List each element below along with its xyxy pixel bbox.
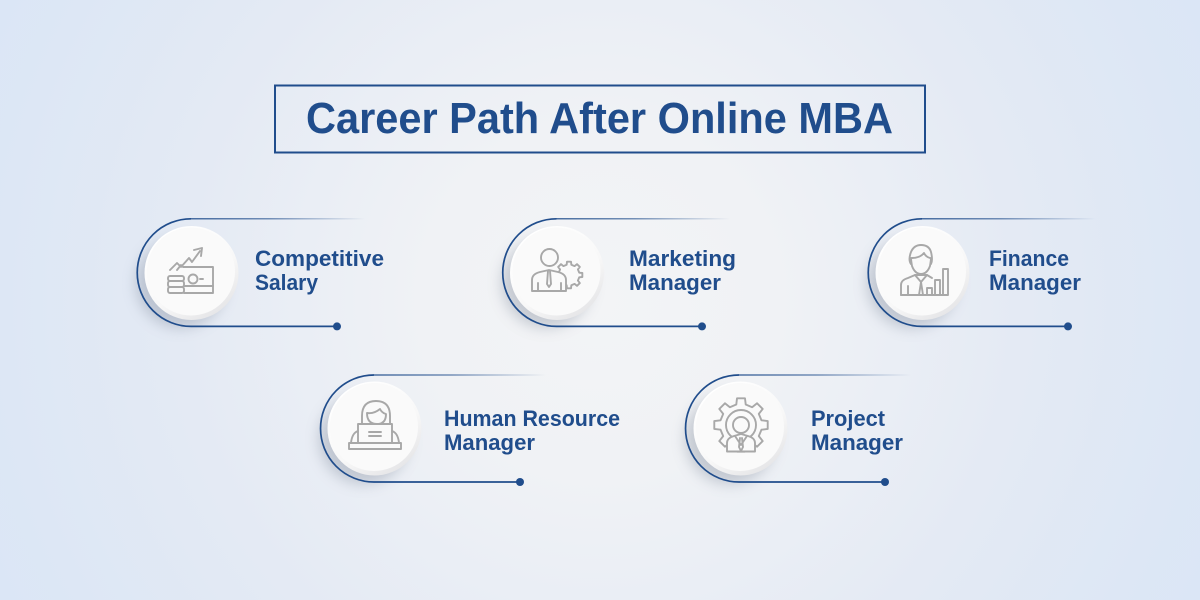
shadow xyxy=(685,394,775,484)
outline and connector xyxy=(503,218,730,330)
label xyxy=(811,406,903,455)
label: Manager xyxy=(989,270,1081,295)
disc xyxy=(694,382,788,476)
label: Human Resource xyxy=(444,406,620,431)
card: Project Manager xyxy=(685,374,911,486)
disc xyxy=(144,226,238,320)
label: Finance xyxy=(989,246,1069,271)
outline and connector xyxy=(686,374,911,486)
label: Marketing xyxy=(629,246,736,271)
icon: manager with gear xyxy=(532,249,582,291)
label xyxy=(444,406,620,455)
outline and connector xyxy=(137,218,365,330)
outline and connector xyxy=(321,374,546,486)
disc xyxy=(876,226,970,320)
disc xyxy=(328,382,422,476)
icon: manager with bar chart xyxy=(901,245,948,295)
icon: manager inside gear xyxy=(714,398,768,452)
label: Manager xyxy=(444,430,535,455)
shadow xyxy=(319,394,409,484)
label: Project xyxy=(811,406,886,431)
card: Competitive Salary xyxy=(136,218,384,330)
label: Competitive xyxy=(255,246,384,271)
shadow xyxy=(136,238,226,328)
shadow xyxy=(502,238,592,328)
label xyxy=(629,246,736,295)
label: Salary xyxy=(255,270,319,295)
label xyxy=(989,246,1081,295)
card: Human Resource Manager xyxy=(319,374,620,486)
label: Manager xyxy=(629,270,721,295)
disc xyxy=(510,226,604,320)
label: Manager xyxy=(811,430,903,455)
shadow xyxy=(867,238,957,328)
label xyxy=(255,246,384,295)
title: Career Path After Online MBA xyxy=(306,94,893,143)
card: Finance Manager xyxy=(867,218,1096,330)
outline and connector xyxy=(868,218,1096,330)
icon: woman at laptop xyxy=(349,401,401,449)
icon: money and rising arrow xyxy=(168,248,213,293)
card: Marketing Manager xyxy=(502,218,736,330)
title xyxy=(275,86,925,152)
